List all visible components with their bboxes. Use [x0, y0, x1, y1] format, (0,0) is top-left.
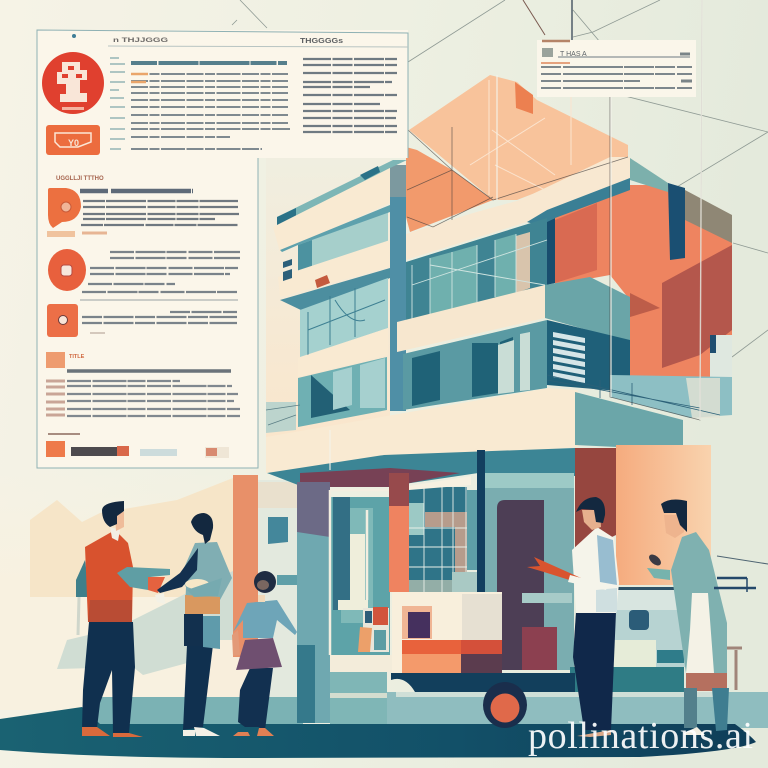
block 1 title: [80, 189, 193, 193]
face: [582, 510, 601, 530]
top teal edge: [277, 160, 407, 227]
lower bar: [714, 587, 756, 589]
shoes: [183, 730, 195, 736]
teal cap: [630, 158, 668, 192]
forearm: [568, 575, 608, 590]
block 1 short: [82, 232, 107, 234]
cart stripe red: [461, 640, 502, 654]
teal strip under band: [527, 178, 630, 226]
upper glass: [406, 218, 547, 332]
base light stripe: [330, 693, 387, 698]
light orange roof plane: [409, 75, 628, 200]
footer square: [46, 441, 65, 457]
shoes: [577, 730, 611, 737]
floor ellipse: [0, 707, 756, 758]
upper cream band: [406, 157, 630, 260]
note orange marker: [541, 62, 570, 64]
cart bottom maroon: [461, 654, 502, 673]
arm: [117, 567, 170, 590]
skirt: [236, 638, 282, 670]
highlighted main line: [131, 61, 287, 65]
sill: [330, 655, 392, 672]
note right tag: [680, 54, 692, 81]
header right: THGGGGs: [300, 38, 343, 45]
pale teal hillside: [57, 570, 235, 675]
counter band: [570, 667, 684, 692]
block 4 lines: [67, 381, 240, 416]
person: child: [232, 571, 297, 736]
sheet border: [37, 30, 408, 468]
left leg: [684, 688, 697, 728]
notch dark: [710, 335, 716, 353]
torso: [233, 600, 297, 638]
navy column: [477, 450, 485, 593]
teal forearm: [187, 578, 222, 597]
block 1 heading: UGGLLJI TTTHO: [56, 176, 104, 182]
note background: [537, 40, 696, 97]
person: man in red: [76, 501, 170, 737]
dark louver wall: [547, 320, 630, 392]
hair: [576, 497, 605, 523]
grey brown block: [685, 190, 732, 243]
panel: top right note: [537, 40, 696, 97]
torso: [85, 530, 133, 622]
door wall: [485, 488, 574, 670]
cart grey panel: [462, 594, 502, 640]
head: [254, 571, 276, 593]
deep red shade: [555, 203, 597, 283]
column dark lower: [297, 645, 315, 723]
chair: [358, 607, 389, 652]
block 2 icon: [48, 249, 86, 291]
face: [257, 580, 269, 590]
top dark strip: [277, 166, 380, 233]
maroon band: [300, 468, 460, 487]
shoes: [82, 727, 110, 736]
teal overhang: [575, 392, 683, 450]
hand: [148, 577, 165, 593]
torso orange: [185, 595, 220, 614]
block 4 left tags: [46, 381, 65, 415]
note icon: [542, 48, 553, 57]
fourth window: [298, 357, 387, 427]
wing backdrop: [266, 158, 390, 438]
collar: [110, 527, 120, 541]
upper column shade: [390, 165, 406, 197]
post: [746, 578, 748, 592]
blue column: [390, 165, 406, 411]
cart bottom orange: [402, 654, 461, 673]
block 4 label: [46, 352, 85, 368]
cart: [392, 592, 502, 673]
lower wall teal: [93, 697, 303, 725]
door: [497, 500, 544, 670]
orange pillar: [233, 475, 258, 657]
third window: [300, 278, 388, 357]
red circle icon: [42, 52, 104, 114]
cart body: [392, 592, 502, 640]
legs: [573, 612, 616, 730]
bay pale door: [350, 534, 365, 600]
right column lines: [303, 59, 397, 132]
right notch: [710, 335, 732, 380]
column: [297, 482, 330, 723]
footer label: [48, 433, 80, 435]
right leg: [712, 688, 729, 731]
building left wing: [266, 158, 407, 438]
maroon block: [522, 627, 557, 670]
orange badge icon: Y0: [68, 138, 79, 148]
window header white: [409, 476, 471, 490]
grid window: [409, 487, 467, 592]
window bay: [330, 497, 390, 655]
bay inner frame: [341, 508, 373, 623]
cream ground wash: [0, 470, 233, 710]
right counter: [570, 587, 694, 692]
cream wall: [190, 640, 297, 700]
brick panel: [662, 245, 732, 368]
orange mass: [555, 185, 732, 395]
peach hills: [30, 478, 233, 597]
footer button: [71, 446, 129, 456]
block 2 rule: [80, 299, 238, 301]
lower body maroon: [686, 673, 727, 691]
foreground wires: [407, 0, 702, 420]
footer mini card: [205, 447, 229, 458]
cart window: [408, 612, 430, 638]
top pin: [72, 34, 76, 38]
back arm: [76, 560, 90, 597]
block 1 icon: [47, 188, 81, 237]
pale teal base: [387, 692, 768, 728]
roof: [406, 75, 628, 232]
note rule: [558, 56, 690, 58]
shelf: [522, 593, 572, 603]
railing: [547, 375, 720, 415]
second cream band: [278, 240, 390, 297]
red wall: [575, 448, 616, 555]
red column: [389, 473, 409, 592]
block 4 bold line: [67, 369, 231, 373]
hem: [596, 588, 617, 612]
side building: [258, 480, 298, 700]
legs: [238, 668, 273, 730]
pale pane: [498, 340, 514, 394]
person: cook: [647, 500, 729, 735]
cart window frame: [402, 606, 432, 639]
hatched roof: [258, 482, 298, 508]
building right volume: [555, 158, 732, 395]
header divider: [108, 46, 408, 47]
teal panel next to navy: [467, 490, 477, 570]
bay frame white: [330, 490, 389, 655]
bay base: [338, 600, 368, 610]
dark orange roof plane: [406, 147, 493, 232]
teal block: [545, 277, 630, 342]
third window curves: [308, 288, 385, 355]
third cream band: [298, 328, 388, 377]
balcony flag: [315, 275, 330, 288]
balcony: [610, 375, 732, 418]
maroon column top: [389, 473, 409, 506]
legs: [183, 645, 213, 730]
side window: [268, 517, 288, 544]
peach wall: [616, 445, 711, 585]
network lines behind the building: [232, 0, 768, 357]
face: [115, 512, 124, 531]
orange badge icon: [46, 125, 100, 155]
counter top: [617, 590, 692, 610]
second window: [298, 210, 388, 275]
cuff: [155, 593, 165, 604]
counter body: [610, 610, 690, 667]
spoon: [647, 552, 663, 568]
counter teal slot: [657, 650, 684, 663]
left illustration backdrop: [0, 470, 303, 725]
second window dark: [298, 240, 312, 275]
left dashes: [110, 58, 125, 149]
side ledge: [277, 575, 297, 585]
apron: [686, 593, 714, 673]
hand: [647, 568, 670, 580]
sheet background: [37, 30, 408, 468]
grid lines: [409, 487, 467, 592]
navy chassis: [391, 673, 575, 692]
teal fascia: [267, 448, 575, 487]
neck: [258, 595, 265, 602]
top wire: [717, 556, 768, 564]
big cream floor band: [266, 388, 578, 473]
lower glass panes: [412, 337, 513, 406]
skirt teal: [203, 616, 220, 649]
tyre: [483, 682, 527, 728]
arm skin: [232, 630, 240, 656]
torso: [572, 527, 619, 613]
cart stripe orange: [402, 640, 461, 654]
counter top edge: [618, 587, 694, 590]
small dark windows: [283, 259, 292, 281]
hair: [102, 501, 124, 527]
wheel: [483, 682, 527, 728]
block 1 lines: [81, 201, 239, 225]
mullions: [412, 234, 547, 320]
base highlight: [396, 692, 716, 697]
navy strip: [668, 183, 685, 260]
teal underside: [280, 205, 390, 252]
legs: [82, 622, 135, 733]
note lines: [541, 67, 692, 88]
block 4 label: TITLE: [69, 354, 85, 360]
grid warm panes: [425, 512, 467, 575]
louvers: [553, 332, 585, 383]
header left: n THJJGGG: [113, 37, 168, 44]
drip line: [78, 597, 79, 635]
footer blue bar: [140, 449, 177, 456]
balcony cream: [686, 378, 720, 418]
ground floor: [266, 388, 711, 723]
panel: main left sheet: [37, 30, 408, 468]
white vertical guides: [330, 0, 702, 470]
cart side cream: [392, 640, 402, 673]
hub: [490, 694, 520, 722]
person: man with folder: [527, 497, 619, 737]
note heading: T HAS A: [560, 51, 587, 58]
fourth panes: [333, 358, 385, 410]
stool: [727, 648, 742, 690]
shoes: [684, 727, 705, 735]
block 3 short: [90, 332, 105, 334]
main text lines: [131, 74, 290, 149]
lower glass: [403, 320, 547, 410]
small orange slab: [515, 82, 533, 114]
person: woman in teal: [155, 513, 232, 736]
bowl: [185, 579, 209, 589]
dark arm: [157, 548, 198, 593]
counter window: [629, 610, 649, 630]
torso: [671, 532, 727, 673]
top cream slab: [273, 168, 390, 252]
third teal underside: [280, 268, 390, 312]
fourth window dark triangle: [311, 375, 350, 418]
building front facade: [390, 157, 732, 418]
cart base and platform: [330, 672, 768, 728]
skirt navy: [184, 614, 203, 646]
red triangle: [630, 293, 660, 317]
torso shade: [88, 600, 132, 622]
hair: [661, 500, 687, 532]
roof lines: [470, 80, 571, 195]
orange markers: [131, 74, 148, 82]
counter light panel: [610, 640, 656, 667]
block 3 lines: [82, 312, 237, 323]
light panes: [430, 234, 516, 317]
block 3 icon: [47, 304, 78, 337]
watermark: pollinations.ai: [528, 715, 753, 757]
balcony rail: [266, 402, 296, 433]
hair: [191, 513, 213, 544]
face: [664, 515, 684, 538]
folder: [527, 557, 581, 583]
second cream band: [397, 285, 545, 352]
upper bar: [717, 577, 747, 579]
torso: [180, 542, 232, 613]
bay dark frame: [333, 497, 350, 610]
blue shirt side: [597, 535, 617, 585]
light lintel: [485, 473, 574, 488]
note top strip: [542, 40, 570, 42]
shoes: [233, 732, 250, 736]
column purple top: [297, 482, 330, 537]
navy jamb: [547, 218, 555, 285]
ground column teal: [330, 672, 387, 724]
block 2 lines: [82, 252, 240, 292]
machine right of cook: [714, 556, 768, 690]
beige pane: [516, 232, 530, 293]
